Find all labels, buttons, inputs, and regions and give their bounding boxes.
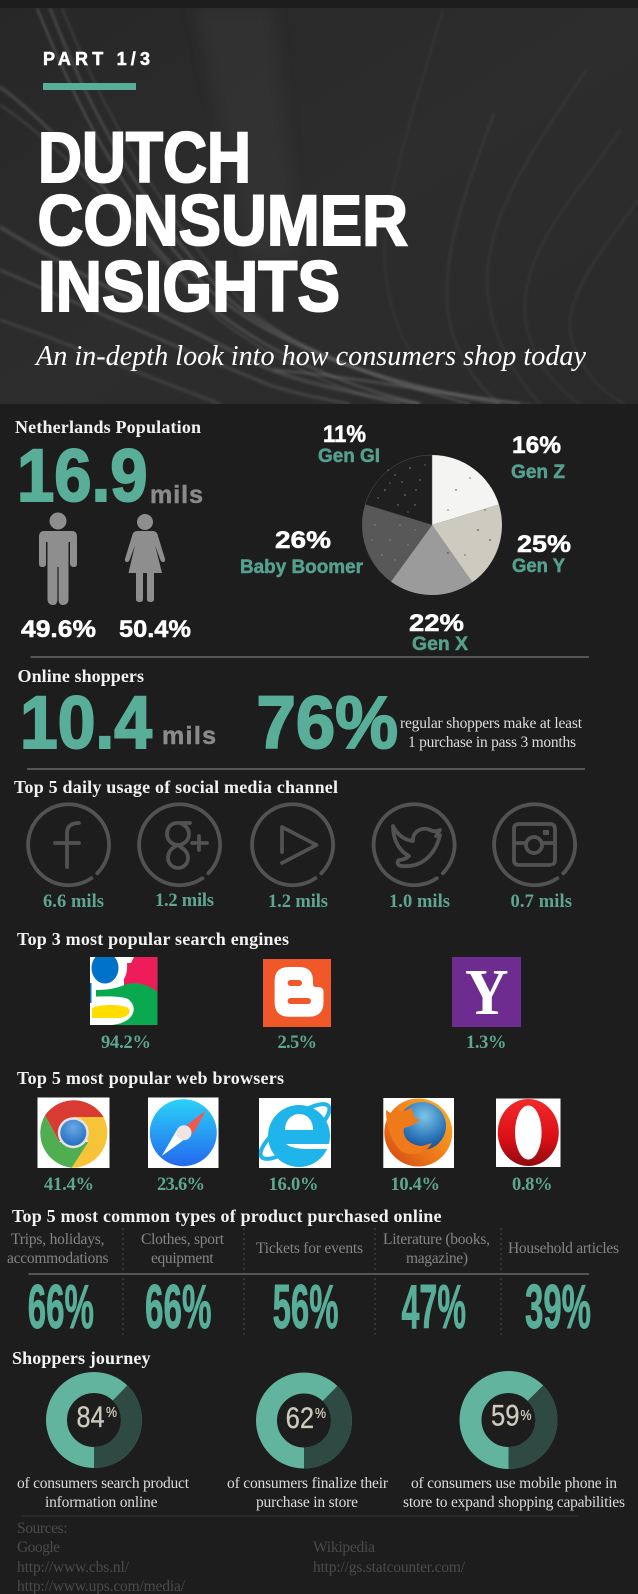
panel: social media usage — [14, 777, 575, 912]
column: clothes — [141, 1231, 225, 1342]
icon: play — [252, 804, 333, 885]
caption: 84%: of consumers search product — [17, 1475, 190, 1492]
slice: Gen Z — [432, 455, 499, 525]
title: CONSUMER — [38, 182, 408, 261]
pie label: Gen Y — [512, 531, 571, 577]
caption: 62% — [227, 1475, 389, 1511]
heading: web browsers: Top 5 most popular web browsers — [17, 1068, 284, 1088]
donut chart: 59%: 59 — [491, 1400, 520, 1433]
column: tickets: 56% — [273, 1273, 338, 1342]
panel: shoppers journey — [12, 1348, 625, 1511]
pie speckle texture — [371, 464, 426, 561]
column: tickets: Tickets for events — [256, 1240, 363, 1257]
stat: male share: 49.6% — [21, 616, 96, 643]
heading: Netherlands Population: Netherlands Population — [15, 417, 201, 437]
panel: web browsers — [17, 1068, 560, 1195]
value: chrome: 41.4% — [44, 1175, 94, 1195]
donut chart: 59%: % — [520, 1407, 532, 1424]
column: clothes: 66% — [145, 1273, 212, 1342]
donut chart: 84% — [56, 1382, 132, 1458]
value: opera: 0.8% — [512, 1175, 552, 1195]
pie label: Gen X — [409, 610, 468, 655]
caption: 59%: of consumers use mobile phone in — [411, 1475, 617, 1492]
icon: instagram — [494, 804, 575, 885]
panel: Netherlands population — [15, 417, 203, 643]
slice: Gen GI — [365, 455, 432, 525]
caption: 84%: information online — [45, 1494, 158, 1511]
caption: 62%: purchase in store — [256, 1494, 358, 1511]
stat: 10.4 mils: mils — [162, 722, 216, 750]
pie chart: generations — [240, 421, 571, 655]
text: regular shoppers note: 1 purchase in pass 3 months — [408, 734, 576, 751]
icon: man — [39, 512, 77, 605]
column: tickets — [256, 1240, 363, 1342]
icon: yahoo tile: Y — [465, 956, 508, 1029]
heading: product types: Top 5 most common types of product purchased online — [12, 1206, 442, 1226]
pie label: Gen GI — [318, 421, 380, 467]
icon: blogger tile — [263, 959, 331, 1027]
icon: woman — [125, 514, 165, 602]
donut chart: 84%: % — [106, 1404, 117, 1421]
value: safari: 23.6% — [157, 1175, 205, 1195]
stat: female share: 50.4% — [119, 616, 191, 643]
value: twitter: 1.0 mils — [389, 892, 450, 912]
heading: search engines: Top 3 most popular search engines — [17, 929, 289, 949]
caption: 84% — [17, 1475, 190, 1511]
column: literature: magazine) — [406, 1250, 468, 1267]
column: literature — [383, 1231, 490, 1342]
column: household — [508, 1240, 619, 1342]
pie label: Baby Boomer: Baby Boomer — [240, 557, 364, 578]
panel: sources: Sources: — [17, 1520, 68, 1537]
stat: 16.9 mils: mils — [150, 481, 203, 509]
value: facebook: 6.6 mils — [43, 892, 104, 912]
stat: 76%: 76% — [256, 681, 398, 764]
icon: yahoo tile — [452, 956, 521, 1029]
heading: Online shoppers: Online shoppers — [18, 666, 144, 686]
column: trips: 66% — [28, 1273, 94, 1342]
icon: chrome — [38, 1098, 110, 1168]
pie label: Gen Y: Gen Y — [512, 556, 565, 577]
icon: firefox — [383, 1098, 454, 1168]
column: trips: accommodations — [7, 1250, 109, 1267]
title — [38, 119, 408, 327]
donut chart: 62% — [266, 1383, 342, 1458]
heading: social media: Top 5 daily usage of social media channel — [14, 777, 338, 797]
pie label: Gen X: Gen X — [412, 634, 468, 655]
pie label: Gen GI: Gen GI — [318, 446, 380, 467]
column: clothes: equipment — [151, 1250, 214, 1267]
caption: 59%: store to expand shopping capabilities — [403, 1494, 625, 1511]
column: literature: Literature (books, — [383, 1231, 490, 1248]
pie label: Gen GI: 11% — [323, 421, 366, 448]
pie label: Baby Boomer — [240, 527, 364, 578]
slice: Gen X — [391, 525, 472, 595]
title: DUTCH — [38, 119, 251, 198]
icon: opera — [496, 1098, 560, 1167]
panel: sources: http://gs.statcounter.com/ — [313, 1559, 466, 1576]
heading: shoppers journey: Shoppers journey — [12, 1348, 150, 1368]
caption: 59% — [403, 1475, 625, 1511]
donut chart: 84%: 84 — [76, 1401, 104, 1434]
column: trips — [7, 1231, 109, 1342]
icon: twitter — [374, 804, 455, 885]
pie label: Gen Y: 25% — [517, 531, 571, 558]
value: youtube: 1.2 mils — [268, 892, 328, 912]
pie label: Gen Z — [511, 432, 565, 483]
donut chart: 62%: 62 — [286, 1402, 314, 1435]
donut chart: 59% — [470, 1382, 547, 1458]
column: trips: Trips, holidays, — [11, 1231, 104, 1248]
title: INSIGHTS — [38, 248, 340, 327]
icon: safari — [148, 1098, 218, 1168]
subtitle: An in-depth look into how consumers shop today — [34, 341, 587, 372]
icon: internet explorer — [259, 1098, 331, 1168]
stat: 10.4 mils: 10.4 — [20, 681, 152, 764]
panel: online shoppers — [18, 666, 583, 764]
panel: product types — [7, 1206, 619, 1342]
text: regular shoppers note: regular shoppers make at least — [400, 715, 583, 732]
value: instagram: 0.7 mils — [510, 892, 572, 912]
slice: Gen Y — [432, 504, 502, 582]
slice: Baby Boomer — [362, 504, 432, 582]
accent bar under part number — [43, 83, 136, 90]
icon: facebook — [28, 804, 109, 885]
pie label: Gen Z: Gen Z — [511, 462, 565, 483]
value: internet explorer: 16.0% — [268, 1175, 318, 1195]
column: literature: 47% — [402, 1273, 466, 1342]
caption: 62%: of consumers finalize their — [227, 1475, 389, 1492]
value: google: 94.2% — [101, 1033, 151, 1053]
column: household: Household articles — [508, 1240, 619, 1257]
pie label: Gen X: 22% — [409, 610, 464, 637]
label: part number: PART 1/3 — [43, 49, 150, 69]
value: blogger: 2.5% — [278, 1033, 317, 1053]
icon: google tile — [90, 952, 157, 1025]
value: yahoo: 1.3% — [466, 1033, 506, 1053]
pie label: Baby Boomer: 26% — [275, 527, 331, 554]
panel: sources: Wikipedia — [313, 1539, 375, 1556]
panel: sources: http://www.cbs.nl/ — [17, 1559, 130, 1576]
column: clothes: Clothes, sport — [141, 1231, 225, 1248]
icon: google plus — [139, 804, 220, 885]
stat: 16.9 mils: 16.9 — [17, 434, 148, 517]
text: regular shoppers note — [400, 715, 583, 751]
panel: search engines — [17, 929, 521, 1053]
donut chart: 62%: % — [315, 1405, 326, 1422]
panel: sources: Google — [17, 1539, 60, 1556]
panel: header banner — [0, 8, 638, 404]
value: google plus: 1.2 mils — [155, 891, 214, 911]
panel: sources — [17, 1520, 466, 1594]
pie label: Gen Z: 16% — [512, 432, 561, 459]
value: firefox: 10.4% — [390, 1175, 440, 1195]
